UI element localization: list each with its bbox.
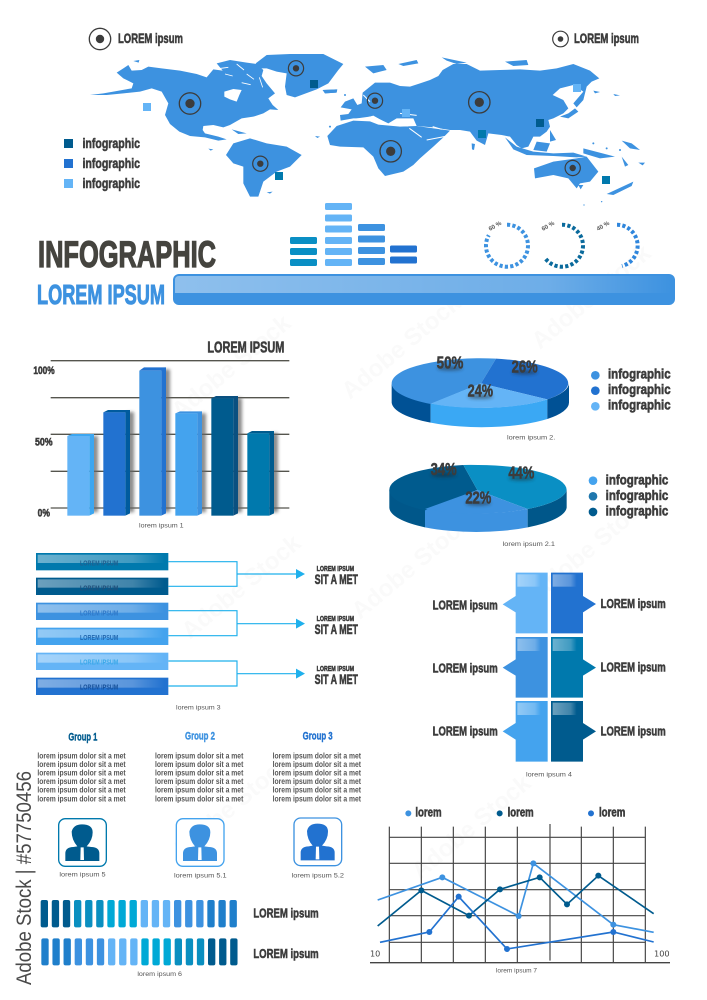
pie 2 legend <box>589 472 669 519</box>
flow label 1 <box>315 564 358 587</box>
arrow panels <box>433 573 666 779</box>
connector group 1 <box>168 562 305 586</box>
pill bars <box>41 900 319 978</box>
map squares <box>143 80 610 184</box>
bar 6 <box>247 431 278 516</box>
ring gauge 3: 40 % <box>596 220 611 233</box>
pie 1 <box>392 352 569 427</box>
bar 1 <box>67 434 98 516</box>
pie 2 caption: lorem ipsum 2.1 <box>503 541 555 548</box>
panels caption: lorem ipsum 4 <box>526 772 572 779</box>
panel left 3: LOREM ipsum <box>433 724 498 739</box>
pie 1 legend: infographic <box>608 398 671 413</box>
panel left 2: LOREM ipsum <box>433 661 498 676</box>
chart legend: lorem <box>508 806 534 820</box>
connector group 3 <box>168 661 305 686</box>
group 2: lorem ipsum dolor sit a met <box>155 760 244 769</box>
group 1: lorem ipsum dolor sit a met <box>37 786 126 795</box>
group 1: lorem ipsum dolor sit a met <box>37 751 126 760</box>
marker: Australia <box>565 160 580 176</box>
group 2: lorem ipsum dolor sit a met <box>155 794 244 803</box>
group 1: lorem ipsum dolor sit a met <box>37 769 126 778</box>
series mid <box>380 894 654 952</box>
flow bars: LOREM IPSUM <box>80 633 118 642</box>
flow label 2 <box>315 614 358 637</box>
axis labels: 100 <box>654 950 670 959</box>
pie charts <box>389 352 671 548</box>
pie 1: 24% <box>468 381 493 401</box>
flow bars: LOREM IPSUM <box>80 559 118 568</box>
pie 2 <box>389 459 567 532</box>
chart legend: lorem <box>599 806 625 820</box>
map key: top right target <box>553 31 639 47</box>
group 1 <box>37 732 126 879</box>
panel left 1: LOREM ipsum <box>433 597 498 612</box>
flow bars: LOREM IPSUM <box>80 682 118 691</box>
ring gauge 2: 60 % <box>541 220 556 233</box>
flow label 1: LOREM IPSUM <box>317 564 354 573</box>
ring gauge 2 <box>541 220 583 267</box>
marker: Greenland <box>288 61 304 76</box>
chart title: LOREM IPSUM <box>207 340 284 357</box>
pill label 1: LOREM ipsum <box>253 905 319 920</box>
panel right 1 <box>551 573 666 633</box>
group 2: lorem ipsum dolor sit a met <box>155 769 244 778</box>
group 1: lorem ipsum 5 <box>59 872 106 879</box>
group 3: lorem ipsum dolor sit a met <box>273 769 361 778</box>
text: Adobe Stock <box>347 509 477 625</box>
axis labels: 10 <box>370 950 380 959</box>
group 2: lorem ipsum dolor sit a met <box>155 786 244 795</box>
series light <box>378 860 654 932</box>
pill row 1 <box>41 900 237 927</box>
panel right 1: LOREM ipsum <box>601 596 666 611</box>
flow bars: LOREM IPSUM <box>80 658 118 667</box>
flow label 3 <box>315 664 358 687</box>
text: Adobe Stock <box>527 239 657 355</box>
map: Eurasia, Africa and Oceania <box>323 57 645 206</box>
ring gauge 3 <box>596 220 638 266</box>
banner bar <box>173 274 675 305</box>
pie 1 legend: infographic <box>608 367 671 382</box>
pill caption: lorem ipsum 6 <box>137 971 182 978</box>
panel left 3 <box>433 701 548 762</box>
marker: South America <box>253 156 268 171</box>
panel left 1 <box>433 573 548 633</box>
bar 3 <box>139 367 170 516</box>
chart legend: lorem <box>415 806 442 820</box>
flow bars: LOREM IPSUM <box>80 583 118 592</box>
flow label 3: LOREM IPSUM <box>317 664 354 673</box>
flow label 2: SIT A MET <box>315 621 358 637</box>
marker: Africa <box>380 141 401 162</box>
subtitle: LOREM IPSUM <box>37 279 165 310</box>
map legend: infographic <box>82 136 140 151</box>
map legend: infographic <box>82 156 140 171</box>
text: Adobe Stock <box>407 769 537 885</box>
ring gauge 1 <box>486 220 528 267</box>
group 1: lorem ipsum dolor sit a met <box>37 760 126 769</box>
pie 1 caption: lorem ipsum 2. <box>507 434 555 441</box>
text: Adobe Stock <box>167 309 297 425</box>
panel right 3 <box>551 701 666 762</box>
pie 1 legend <box>591 367 671 413</box>
axis labels <box>33 365 55 520</box>
pie 2 legend: infographic <box>606 488 669 503</box>
panel right 2 <box>551 637 666 698</box>
pill label 2: LOREM ipsum <box>253 946 319 961</box>
group 3: lorem ipsum dolor sit a met <box>273 794 361 803</box>
stock credit: Adobe Stock | #57750456 <box>13 771 36 985</box>
map: Americas <box>90 54 343 197</box>
pie 2 legend: infographic <box>606 504 669 519</box>
group 2: lorem ipsum 5.1 <box>174 872 227 879</box>
text: Adobe Stock <box>177 529 307 645</box>
group 2: lorem ipsum dolor sit a met <box>155 751 244 760</box>
groups <box>37 731 361 879</box>
marker: North America <box>179 93 201 114</box>
group 3: lorem ipsum 5.2 <box>292 872 344 879</box>
flow bars: LOREM IPSUM <box>80 608 118 617</box>
axis labels: 50% <box>35 436 53 448</box>
axis labels <box>370 950 670 959</box>
flow label 1: SIT A MET <box>315 571 358 587</box>
group 1: Group 1 <box>68 732 97 744</box>
map legend: infographic <box>82 176 140 191</box>
grid lines <box>51 361 289 508</box>
bar chart <box>33 340 289 529</box>
bar 2 <box>103 410 134 516</box>
equalizer chart <box>290 203 417 266</box>
panel right 2: LOREM ipsum <box>601 660 666 675</box>
pie 2 legend: infographic <box>606 472 669 487</box>
group 1: lorem ipsum dolor sit a met <box>37 777 126 786</box>
bar 4 <box>175 411 206 516</box>
flow bars <box>36 553 168 695</box>
axis labels: 0% <box>38 508 50 520</box>
group 2 <box>155 731 244 879</box>
group 3: lorem ipsum dolor sit a met <box>273 760 361 769</box>
chart caption: lorem ipsum 1 <box>139 522 184 529</box>
title: INFOGRAPHIC <box>38 233 216 275</box>
marker: Asia <box>469 92 490 113</box>
panel right 3: LOREM ipsum <box>601 724 666 739</box>
axis labels: 100% <box>33 365 55 377</box>
bar 5 <box>211 396 242 516</box>
panel left 2 <box>433 637 548 698</box>
connector group 2 <box>168 611 305 636</box>
pill row 2 <box>41 938 238 965</box>
flow caption: lorem ipsum 3 <box>176 704 221 711</box>
map key: top right target: LOREM ipsum <box>574 31 639 46</box>
world map <box>90 54 645 206</box>
map key: top left target: LOREM ipsum <box>118 31 183 46</box>
pie 2: 44% <box>508 462 534 482</box>
map legend <box>64 136 140 191</box>
group 1: lorem ipsum dolor sit a met <box>37 794 126 803</box>
series dark <box>378 873 654 926</box>
map key: top left target <box>89 28 183 50</box>
flow label 2: LOREM IPSUM <box>317 614 354 623</box>
group 3: lorem ipsum dolor sit a met <box>273 777 361 786</box>
pie 1 legend: infographic <box>608 382 671 397</box>
flow diagram <box>36 553 358 711</box>
pie 2: 22% <box>465 487 491 507</box>
marker: Europe <box>367 93 383 108</box>
group 2: lorem ipsum dolor sit a met <box>155 777 244 786</box>
chart grid <box>370 824 670 963</box>
group 3: lorem ipsum dolor sit a met <box>273 786 361 795</box>
chart caption: lorem ipsum 7 <box>496 967 537 974</box>
text: Adobe Stock <box>337 289 467 405</box>
flow label 3: SIT A MET <box>315 671 358 687</box>
group 3: lorem ipsum dolor sit a met <box>273 751 361 760</box>
pie 1: 26% <box>512 356 538 376</box>
chart legend <box>405 806 625 820</box>
text: Adobe Stock <box>527 489 657 605</box>
group 2: Group 2 <box>185 731 215 743</box>
ring gauge 1: 60 % <box>488 220 503 233</box>
text: Adobe Stock <box>167 749 297 865</box>
pie 2: 34% <box>431 459 457 479</box>
group 3: Group 3 <box>303 731 333 743</box>
pie 1: 50% <box>437 352 463 372</box>
group 3 <box>273 731 361 879</box>
line chart <box>370 806 670 974</box>
